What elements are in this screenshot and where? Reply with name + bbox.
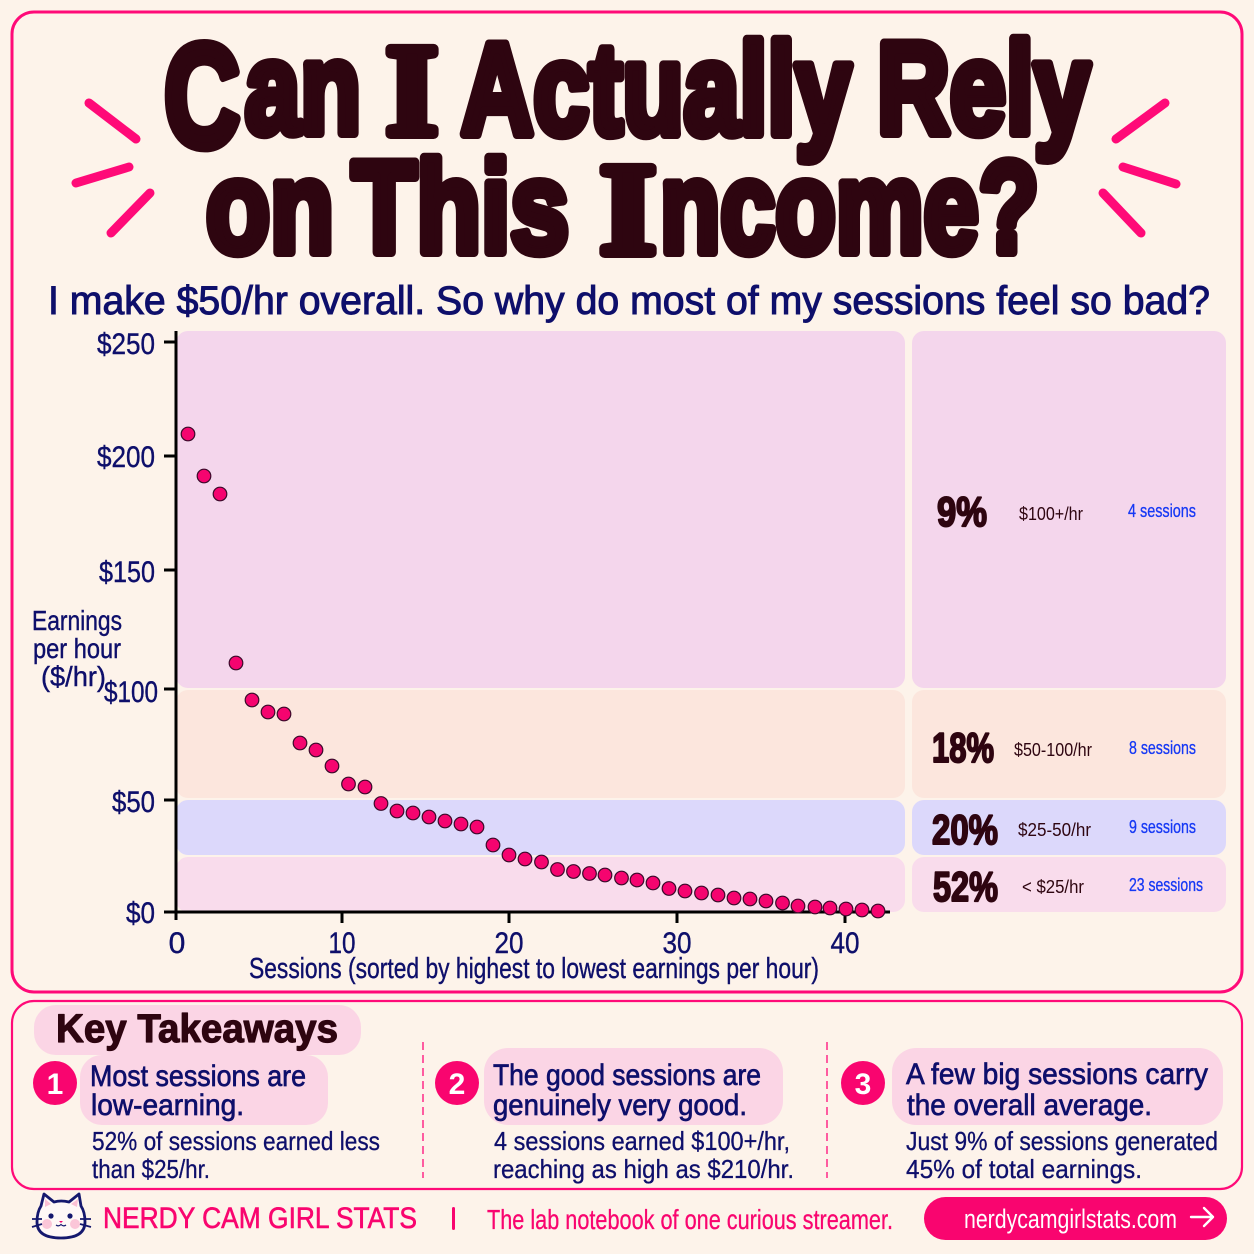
x axis labels: 30: [662, 927, 692, 960]
chart background bands: [176, 331, 905, 912]
panel: 100+ per hour share: 9%: [937, 488, 987, 535]
y axis labels: [97, 328, 158, 930]
subtitle: I make $50/hr overall. So why do most of my sessions feel so bad?: [48, 279, 1210, 323]
footer brand name: NERDY CAM GIRL STATS: [103, 1202, 417, 1235]
takeaway 2: 2: [449, 1068, 465, 1101]
x axis labels: 20: [494, 927, 524, 960]
panel: under 25 per hour share: [912, 857, 1226, 912]
y axis title: [32, 605, 122, 692]
panel: 50 to 100 per hour share: $50-100/hr: [1014, 740, 1092, 760]
x axis labels: 0: [169, 927, 185, 960]
data points: [181, 427, 885, 918]
takeaway 1: [33, 1055, 380, 1184]
y axis labels: $100: [104, 676, 158, 709]
x axis labels: 10: [328, 927, 356, 960]
icon: cat logo: [32, 1194, 91, 1238]
panel: 50 to 100 per hour share: 18%: [932, 724, 994, 771]
x axis title: Sessions (sorted by highest to lowest earnings per hour): [249, 953, 819, 985]
y axis title: Earnings: [32, 605, 122, 636]
takeaway 3: [841, 1048, 1223, 1184]
y axis labels: $200: [97, 441, 155, 474]
title: I: [386, 19, 438, 163]
title: on: [206, 134, 334, 280]
panel: under 25 per hour share: 23 sessions: [1129, 875, 1203, 895]
title: This: [352, 134, 569, 280]
takeaway 3: 3: [855, 1068, 871, 1101]
takeaway 1: low-earning.: [91, 1089, 244, 1122]
takeaway 3: 45% of total earnings.: [906, 1154, 1142, 1184]
takeaway 2: genuinely very good.: [493, 1089, 747, 1122]
panel: key takeaways: [12, 1001, 1242, 1189]
footer url button: nerdycamgirlstats.com: [964, 1204, 1177, 1234]
title: an: [245, 15, 361, 161]
heading: key takeaways: Key Takeaways: [56, 1007, 338, 1051]
takeaway 2: 4 sessions earned $100+/hr,: [494, 1126, 790, 1156]
y axis labels: $150: [99, 556, 155, 589]
icon: right emphasis sparks: [1103, 103, 1176, 233]
title: [164, 14, 1090, 282]
title: Rely: [877, 15, 1090, 161]
icon: left emphasis sparks: [76, 103, 150, 233]
panel: 50 to 100 per hour share: [912, 690, 1226, 798]
takeaway 2: [435, 1048, 794, 1184]
title: Actually: [461, 16, 851, 162]
x axis labels: [169, 927, 860, 960]
title: ncome?: [660, 134, 1039, 280]
title: I: [600, 138, 656, 282]
takeaway 1: 52% of sessions earned less: [92, 1126, 380, 1156]
takeaway 1: Most sessions are: [90, 1060, 306, 1093]
y axis title: per hour: [33, 633, 121, 664]
y axis title: ($/hr): [41, 661, 106, 692]
x axis labels: 40: [830, 927, 860, 960]
takeaway 1: than $25/hr.: [92, 1154, 210, 1184]
takeaway 2: The good sessions are: [493, 1059, 761, 1092]
panel: 100+ per hour share: $100+/hr: [1019, 504, 1083, 524]
chart: earnings per session scatter: [32, 328, 905, 985]
panel: 100+ per hour share: [912, 331, 1226, 688]
footer divider and tagline: The lab notebook of one curious streamer.: [487, 1204, 893, 1235]
panel: 100+ per hour share: 4 sessions: [1128, 501, 1196, 521]
y axis labels: $250: [97, 328, 155, 361]
panel: under 25 per hour share: 52%: [933, 863, 998, 910]
panel: 25 to 50 per hour share: 9 sessions: [1129, 817, 1196, 837]
panel: 25 to 50 per hour share: $25-50/hr: [1018, 820, 1091, 840]
panel: 25 to 50 per hour share: [912, 800, 1226, 855]
takeaway 3: the overall average.: [907, 1089, 1152, 1122]
panel: 50 to 100 per hour share: 8 sessions: [1129, 738, 1196, 758]
title: C: [164, 14, 240, 177]
y axis labels: $50: [112, 786, 155, 819]
panel: 25 to 50 per hour share: 20%: [932, 806, 998, 853]
takeaway 2: reaching as high as $210/hr.: [493, 1154, 794, 1184]
takeaway 3: A few big sessions carry: [906, 1058, 1208, 1091]
panel: under 25 per hour share: < $25/hr: [1022, 877, 1084, 897]
takeaway 3: Just 9% of sessions generated: [906, 1126, 1218, 1156]
footer url button: [924, 1197, 1227, 1240]
takeaway 1: 1: [47, 1068, 63, 1101]
panel: main chart frame: [12, 12, 1242, 992]
y axis labels: $0: [126, 897, 155, 930]
chart axes and ticks: [164, 331, 890, 923]
